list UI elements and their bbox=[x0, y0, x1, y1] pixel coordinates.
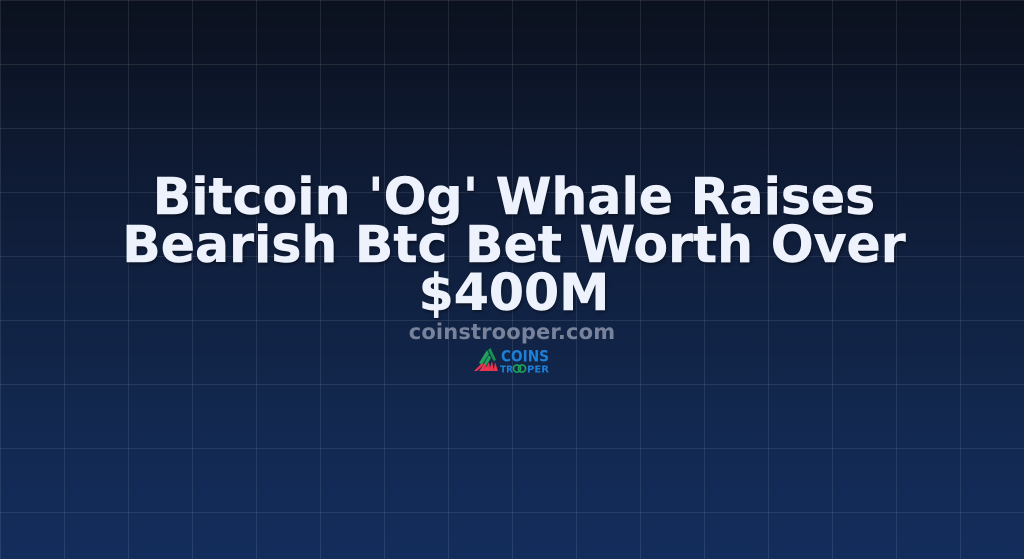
title: $400M bbox=[419, 263, 609, 322]
website label: coinstrooper.com bbox=[409, 320, 615, 344]
title bbox=[122, 167, 908, 322]
logo glyph: double O rings bbox=[513, 365, 526, 372]
title: Bearish Btc Bet Worth Over bbox=[122, 215, 906, 274]
logo: Coins Trooper bbox=[474, 346, 549, 374]
icon: mountain chart bbox=[474, 348, 498, 371]
title: Bitcoin 'Og' Whale Raises bbox=[153, 167, 875, 226]
